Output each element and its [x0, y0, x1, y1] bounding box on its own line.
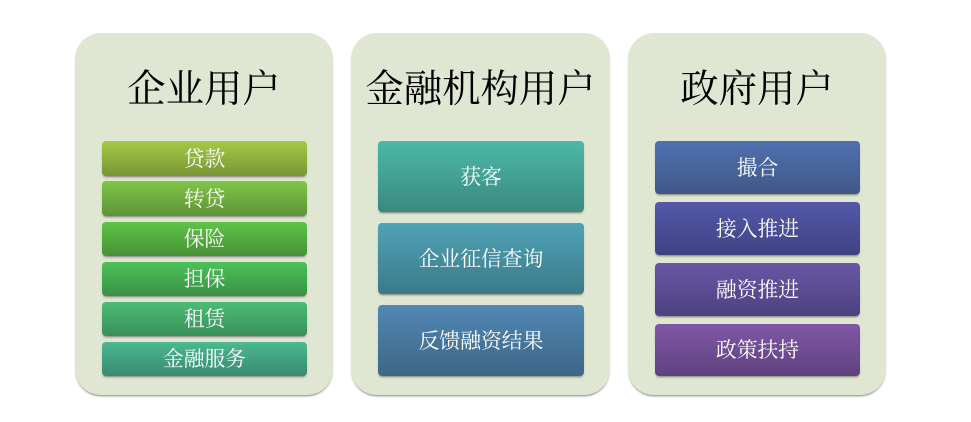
panel: enterprise users [75, 33, 333, 395]
item: matchmaking [655, 141, 860, 194]
item: customer acquisition [378, 141, 584, 212]
panel: financial institution users [351, 33, 610, 395]
item: insurance: 保险 [184, 228, 225, 251]
item: financing promotion [655, 263, 860, 316]
item: matchmaking: 撮合 [737, 157, 778, 180]
item: loan transfer: 转贷 [184, 188, 225, 211]
item: onboarding promotion: 接入推进 [716, 218, 799, 241]
item: financing promotion: 融资推进 [716, 279, 799, 302]
item: loan transfer [102, 181, 307, 216]
item: guarantee [102, 262, 307, 296]
heading: enterprise users: 企业用户 [127, 68, 281, 110]
item: leasing [102, 302, 307, 336]
item: onboarding promotion [655, 202, 860, 255]
item: leasing: 租赁 [184, 308, 225, 331]
item: financial services [102, 342, 307, 376]
heading: financial institution users: 金融机构用户 [365, 68, 596, 110]
item: loans: 贷款 [184, 148, 225, 171]
item: customer acquisition: 获客 [460, 166, 502, 189]
item: insurance [102, 222, 307, 256]
item: financial services: 金融服务 [163, 348, 246, 371]
item: financing result feedback: 反馈融资结果 [419, 330, 543, 353]
item: financing result feedback [378, 305, 584, 376]
item: loans [102, 141, 307, 176]
item: policy support [655, 324, 860, 376]
item: enterprise credit query [378, 223, 584, 294]
heading: government users: 政府用户 [680, 68, 834, 110]
item: guarantee: 担保 [184, 268, 225, 291]
item: enterprise credit query: 企业征信查询 [419, 248, 543, 271]
panel: government users [628, 33, 886, 395]
item: policy support: 政策扶持 [716, 339, 799, 362]
